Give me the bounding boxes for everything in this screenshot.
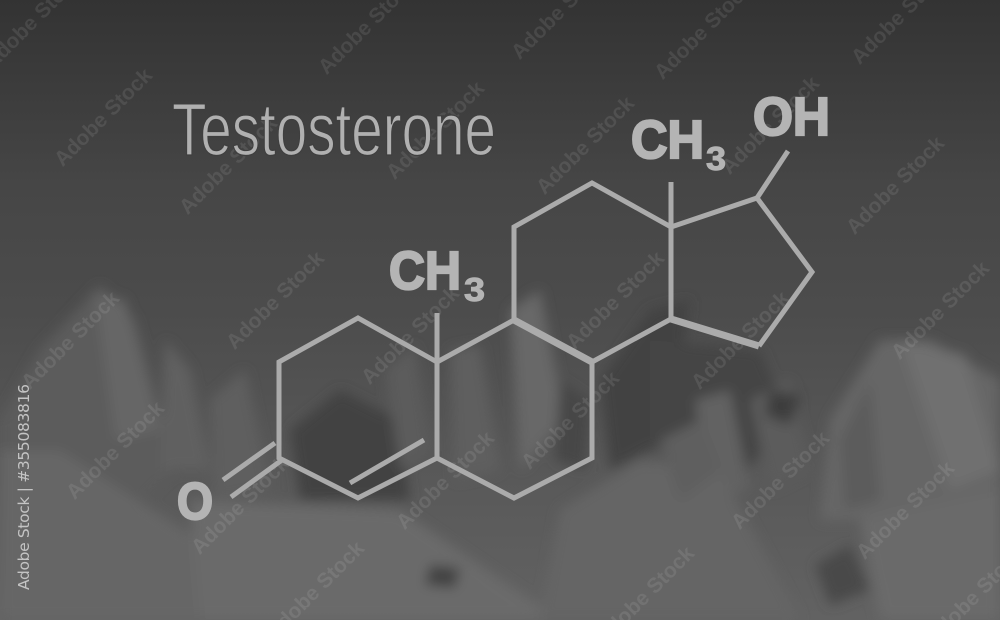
title: Testosterone — [172, 88, 496, 171]
watermarks: Adobe Stock — [517, 367, 624, 474]
ring D — [671, 198, 812, 346]
watermarks: Adobe Stock — [842, 132, 949, 239]
ring C — [514, 183, 671, 362]
side credit: Adobe Stock | #355083816 — [15, 384, 33, 590]
label: O: O — [177, 473, 213, 531]
ring B — [437, 320, 514, 458]
carbonyl bond 2 — [231, 460, 282, 497]
upper methyl bond — [668, 182, 674, 227]
ring A — [279, 318, 437, 498]
label: lower subscript 3: 3 — [464, 271, 485, 308]
ring B lower — [437, 362, 592, 498]
molecule skeleton — [223, 151, 812, 498]
watermarks: Adobe Stock — [852, 457, 959, 564]
watermarks: Adobe Stock — [532, 92, 639, 199]
watermarks: Adobe Stock — [687, 287, 794, 394]
blurred mountain backdrop — [0, 285, 1000, 620]
watermarks: Adobe Stock — [175, 112, 282, 219]
watermarks: Adobe Stock — [17, 287, 124, 394]
watermarks: Adobe Stock — [717, 72, 824, 179]
label: OH: OH — [753, 87, 830, 147]
watermarks: Adobe Stock — [222, 247, 329, 354]
watermarks: Adobe Stock — [392, 427, 499, 534]
label: upper CH3: CH — [631, 110, 704, 170]
ring double bond — [350, 440, 424, 483]
watermarks: Adobe Stock — [382, 77, 489, 184]
label: lower CH3: CH — [389, 241, 461, 301]
carbonyl bond 1 — [223, 443, 275, 480]
thick bond B-C — [514, 320, 592, 362]
hydroxyl bond — [757, 151, 788, 198]
watermarks: Adobe Stock — [357, 282, 464, 389]
labels — [177, 87, 830, 531]
watermarks: Adobe Stock — [50, 64, 157, 171]
thick bond C-D — [671, 319, 759, 346]
watermarks: Adobe Stock — [187, 452, 294, 559]
watermarks: Adobe Stock — [727, 427, 834, 534]
watermarks: Adobe Stock — [62, 397, 169, 504]
watermarks: Adobe Stock — [887, 257, 994, 364]
lower methyl bond — [434, 313, 440, 362]
label: upper subscript 3: 3 — [706, 140, 726, 177]
watermarks: Adobe Stock — [562, 247, 669, 354]
